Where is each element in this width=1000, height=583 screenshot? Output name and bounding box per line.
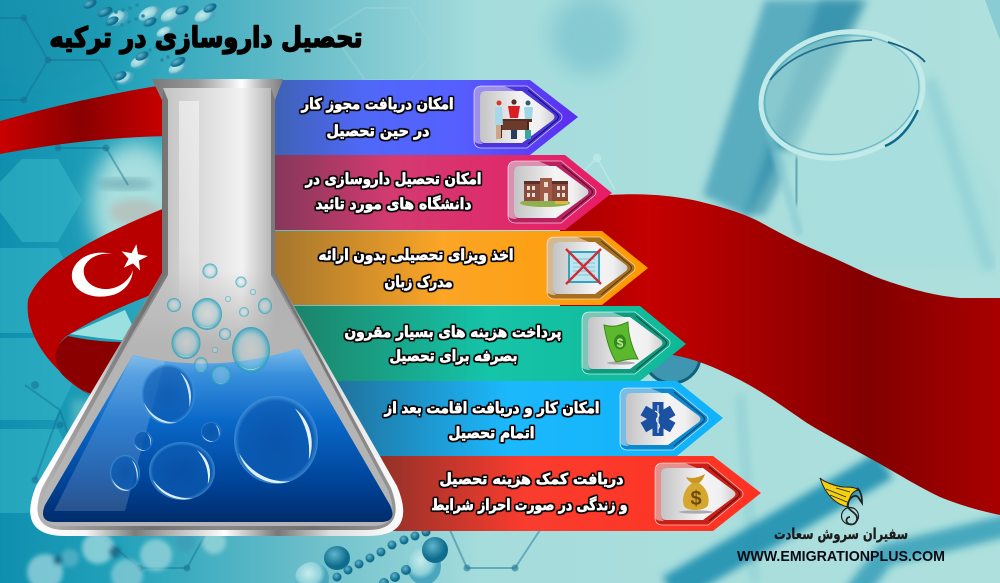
red ribbon with Turkish flag: [0, 84, 1000, 515]
text: مدرک زبان: [384, 273, 452, 291]
liquid: [43, 348, 392, 522]
text: پرداخت هزینه های بسیار مقرون: [344, 323, 562, 342]
banner 2: [274, 155, 612, 230]
text: [301, 95, 454, 140]
flask: rim: [152, 79, 283, 100]
text: در حین تحصیل: [326, 122, 430, 140]
icon: banknote: $: [617, 336, 624, 350]
banner 4: [290, 306, 686, 381]
ribbon: main band: [28, 206, 170, 396]
icon: star: [122, 244, 148, 271]
icon plate: [582, 312, 670, 374]
icon plate: [655, 463, 743, 525]
bubbles above liquid: [167, 264, 272, 385]
brand name: سفیران سروش سعادت: [774, 525, 908, 543]
text: دریافت کمک هزینه تحصیل: [440, 470, 624, 488]
text: اتمام تحصیل: [448, 424, 534, 442]
icon plate: [547, 237, 635, 299]
DNA models: [27, 0, 448, 583]
text: دانشگاه های مورد تائید: [316, 195, 472, 213]
icon: people at a table: [495, 99, 533, 139]
Erlenmeyer flask: [30, 79, 403, 536]
icon: money bag: $: [690, 488, 702, 510]
flask: neck highlight: [179, 101, 199, 311]
flask: outer frame: [30, 79, 403, 536]
text: امکان کار و دریافت اقامت بعد از: [384, 399, 600, 417]
icon plate: [620, 388, 708, 450]
text: و زندگی در صورت احراز شرایط: [432, 496, 628, 514]
flask: inner frame: [37, 88, 396, 530]
round flask bottom photo: [644, 329, 700, 383]
logo: [737, 478, 945, 565]
icon: medical star of life: [641, 402, 675, 436]
ribbon: right sweep: [560, 194, 1000, 515]
ribbon: top left band: [0, 84, 170, 154]
title: تحصیل داروسازی در ترکیه: [50, 21, 362, 54]
icon plate: [508, 161, 596, 223]
test tube photo: [703, 0, 1000, 270]
icon: crescent: [72, 253, 133, 297]
icon: winged swan emblem: [820, 478, 862, 524]
flask: glass: [42, 88, 392, 526]
text: اخذ ویزای تحصیلی بدون ارائه: [318, 246, 514, 264]
icon: university building: [520, 178, 570, 207]
ribbon: fold shadow: [55, 336, 135, 398]
banner 5: [330, 381, 723, 456]
banner 1: [274, 80, 578, 155]
text: [432, 470, 628, 514]
banner 3: [274, 231, 648, 305]
flask: glass lower shading: [42, 270, 392, 526]
text: امکان دریافت مجوز کار: [301, 95, 454, 113]
liquid highlight: [54, 356, 165, 511]
blue reflections: [670, 395, 1000, 583]
text: [318, 246, 514, 291]
text: [305, 170, 482, 213]
website: WWW.EMIGRATIONPLUS.COM: [737, 548, 945, 565]
banner 6: [370, 456, 761, 531]
hexagons pattern: [0, 8, 615, 572]
bubbles in liquid: [110, 364, 318, 500]
icon: crossed out language certificate: [566, 249, 601, 284]
text: امکان تحصیل داروسازی در: [305, 170, 482, 188]
icon plate: [474, 86, 562, 148]
text: [384, 399, 600, 442]
text: بصرفه برای تحصیل: [390, 347, 518, 365]
text: [344, 323, 562, 365]
